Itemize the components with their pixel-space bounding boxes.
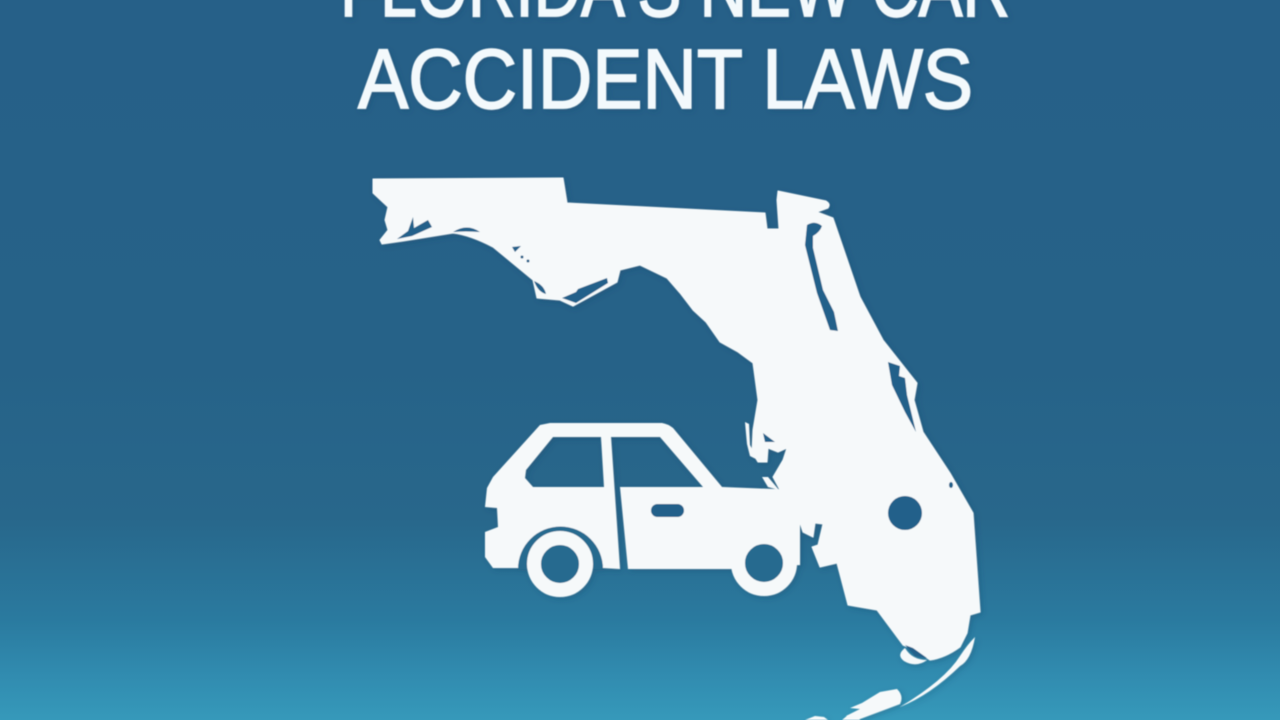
- Florida state silhouette: [373, 178, 980, 660]
- east lagoon: [888, 362, 916, 432]
- St Johns river: [805, 223, 838, 331]
- door handle: [651, 504, 684, 517]
- car: [485, 423, 800, 590]
- panhandle bay fingers: [397, 217, 432, 239]
- title: [340, 0, 1010, 126]
- Lake Okeechobee: [888, 496, 922, 530]
- icon: Florida map with car: [373, 178, 980, 720]
- Tampa Bay inlet: [763, 433, 775, 442]
- car body: [485, 423, 800, 569]
- rear wheel: [534, 538, 586, 590]
- title: ACCIDENT LAWS: [358, 32, 973, 126]
- Apalachee coast lagoons: [534, 281, 546, 294]
- front wheel: [738, 537, 790, 589]
- rear wheel arch: [518, 526, 603, 569]
- Gulf coast islands and Florida Keys: [745, 422, 975, 720]
- water cutouts: [397, 217, 953, 658]
